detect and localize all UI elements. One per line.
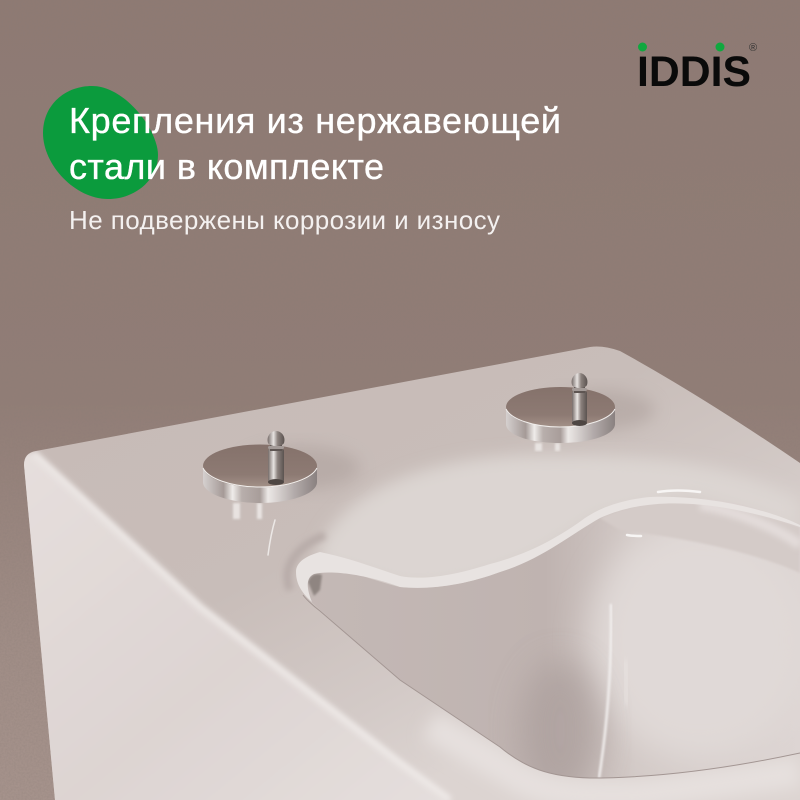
heading: Крепления из нержавеющей bbox=[69, 100, 561, 141]
shadow around the hook bbox=[287, 535, 325, 590]
seat depression highlight bbox=[318, 455, 800, 588]
disc reflection bbox=[535, 443, 560, 451]
toilet bowl ceramic body bbox=[10, 346, 800, 800]
bowl rim edge line bbox=[303, 595, 800, 778]
bowl water streak highlight bbox=[599, 604, 611, 778]
shadows next to discs bbox=[240, 390, 655, 490]
inner rim wall bbox=[603, 516, 800, 572]
bowl interior bbox=[308, 505, 799, 778]
registered mark: ® bbox=[749, 42, 757, 54]
right stainless steel mount bbox=[506, 373, 615, 451]
logo green dots bbox=[638, 42, 724, 52]
disc top bbox=[203, 444, 317, 488]
top surface of the ceramic bbox=[24, 346, 800, 800]
left stainless steel mount bbox=[203, 431, 317, 519]
pin bbox=[268, 431, 284, 485]
disc top bbox=[506, 387, 615, 427]
disc reflection bbox=[233, 503, 262, 519]
dark slot inside hook bbox=[308, 574, 322, 596]
white hook lip at left end bbox=[296, 497, 800, 602]
disc side bbox=[506, 407, 615, 443]
disc side bbox=[203, 466, 317, 503]
logo: IDDIS: IDDIS bbox=[637, 48, 751, 96]
green blob accent bbox=[43, 86, 158, 199]
pin bbox=[572, 373, 587, 426]
glossy reflections bbox=[268, 490, 700, 555]
heading bbox=[69, 100, 561, 187]
lower rim foreground bbox=[430, 725, 800, 796]
subheading: Не подвержены коррозии и износу bbox=[69, 205, 500, 235]
front side face bbox=[10, 445, 460, 800]
heading: стали в комплекте bbox=[69, 146, 384, 187]
